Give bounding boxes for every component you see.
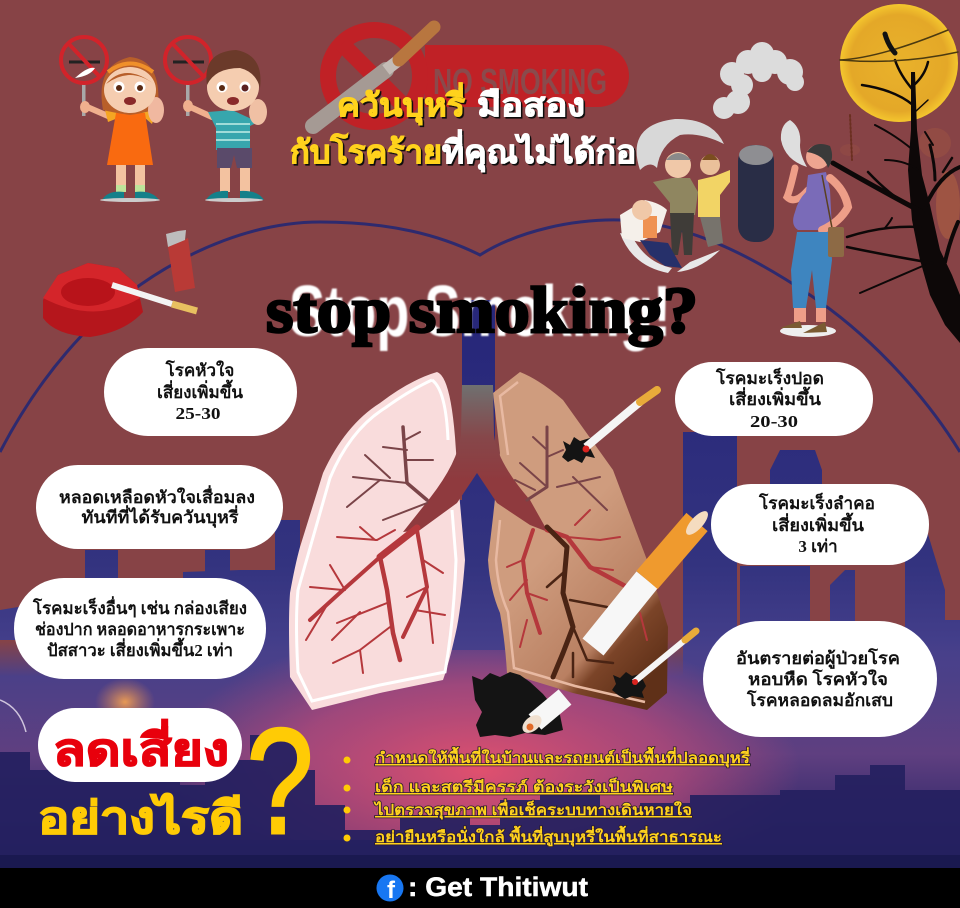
callout: blood vessels: หลอดเหลือดหัวใจเสื่อมลง: [59, 485, 255, 507]
right lung: [488, 372, 668, 710]
curved line: [0, 220, 960, 452]
footer: [0, 868, 960, 908]
title: ที่คุณไม่ได้ก่อ: [442, 129, 636, 173]
bronchial branches: [306, 510, 647, 673]
heading: reduce risk: [38, 708, 243, 843]
icon: burn mark with small cigarette, top: [562, 390, 657, 463]
icon: large cigarette: [593, 508, 711, 647]
callout: lung cancer: 20-30: [750, 412, 798, 431]
callout: danger to patients: หอบหืด โรคหัวใจ: [748, 669, 888, 689]
callout: danger to patients: อันตรายต่อผู้ป่วยโรค: [736, 648, 900, 670]
callout: other cancers: [14, 578, 266, 679]
no smoking sign: NO SMOKING: [433, 61, 607, 102]
no smoking sign: [313, 27, 629, 126]
callout: throat cancer: [711, 484, 929, 565]
icon: burn mark with small cigarette, lower: [612, 631, 696, 699]
footer: : Get Thitiwut: [408, 872, 588, 902]
icon: ashtray: [43, 263, 197, 337]
callout: throat cancer: โรคมะเร็งลำคอ: [758, 491, 875, 513]
icon: lighter: [166, 230, 195, 292]
icon: group of people in smoke circle: [620, 119, 730, 273]
callout: heart disease: 25-30: [176, 404, 220, 423]
icon: question mark: ?: [247, 697, 313, 865]
callout: danger to patients: [703, 621, 937, 737]
title: กับโรคร้าย: [290, 133, 442, 170]
rust speckle foliage: [840, 128, 960, 239]
list: prevention tips: เด็ก และสตรีมีครรภ์ ต้องระวังเป็นพิเศษ: [375, 777, 673, 796]
lungs illustration: [289, 372, 668, 710]
heading: stop smoking: Stop Smoking!: [289, 272, 671, 352]
callout: throat cancer: 3 เท่า: [798, 537, 838, 556]
icon: boy with sign: [165, 37, 267, 202]
heading: stop smoking: stop smoking?: [266, 274, 698, 347]
icon: girl with sign: [61, 37, 164, 202]
callout: blood vessels: ทันทีที่ได้รับควันบุหรี่: [82, 505, 239, 528]
icon: facebook: f: [387, 877, 396, 904]
callout: blood vessels: [36, 465, 283, 549]
icon: facebook: [376, 874, 404, 904]
icon: dark cylinder: [738, 145, 774, 242]
list: prevention tips: [344, 746, 751, 847]
callout: danger to patients: โรคหลอดลมอักเสบ: [746, 690, 893, 710]
left lung: [289, 372, 465, 710]
icon: smoke cloud: [713, 42, 804, 119]
callout: other cancers: ปัสสาวะ เสี่ยงเพิ่มขึ้น2 เท่า: [47, 637, 233, 660]
trachea: [403, 385, 548, 532]
callout: heart disease: โรคหัวใจ: [165, 360, 234, 380]
icon: wall burn with cigarette: [472, 672, 565, 737]
city skyline: [0, 300, 960, 868]
title: [290, 82, 636, 173]
list: prevention tips: ไปตรวจสุขภาพ เพื่อเช็คระบบทางเดินหายใจ: [373, 799, 692, 820]
heading: reduce risk: ลดเสี่ยง: [53, 719, 229, 775]
callout: heart disease: เสี่ยงเพิ่มขึ้น: [157, 379, 243, 402]
icon: moon: [840, 4, 958, 122]
heading: reduce risk: อย่างไรดี: [38, 792, 243, 843]
callout: heart disease: [104, 348, 297, 436]
callout: other cancers: โรคมะเร็งอื่นๆ เช่น กล่องเสียง: [32, 596, 247, 618]
icon: bare tree with bird: [833, 30, 960, 343]
callout: lung cancer: โรคมะเร็งปอด: [715, 366, 824, 388]
list: prevention tips: กำหนดให้พื้นที่ในบ้านและรถยนต์เป็นพื้นที่ปลอดบุหรี่: [375, 746, 751, 768]
callout: lung cancer: [675, 362, 873, 436]
icon: pregnant woman smoking: [780, 120, 848, 337]
callout: throat cancer: เสี่ยงเพิ่มขึ้น: [772, 512, 864, 535]
title: ควันบุหรี่: [337, 82, 465, 126]
callout: lung cancer: เสี่ยงเพิ่มขึ้น: [729, 386, 821, 409]
list: prevention tips: อย่ายืนหรือนั่งใกล้ พื้นที่สูบบุหรี่ในพื้นที่สาธารณะ: [375, 825, 722, 847]
title: มือสอง: [477, 87, 585, 123]
callout: other cancers: ช่องปาก หลอดอาหารกระเพาะ: [35, 620, 245, 639]
